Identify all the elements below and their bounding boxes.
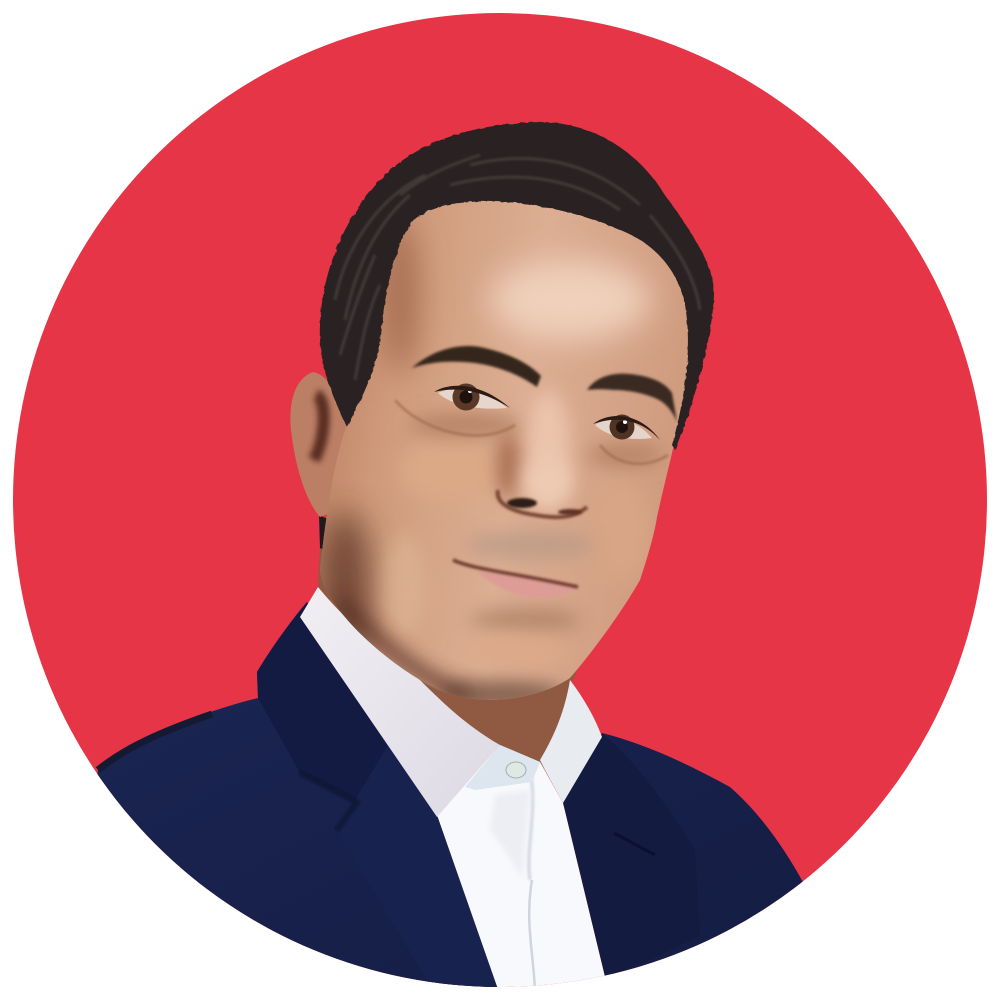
eye left (395, 384, 515, 435)
hair strands (335, 155, 700, 380)
face shading (490, 260, 650, 340)
left collar (300, 587, 500, 817)
neck (318, 546, 578, 776)
mouth (453, 560, 580, 597)
jacket (60, 602, 803, 1000)
eyebrow right (587, 374, 677, 422)
figure clipped to circle (60, 122, 803, 1000)
right lapel (563, 733, 681, 976)
ear (290, 372, 350, 517)
upper lapel (257, 602, 387, 800)
eyebrow left (412, 346, 541, 387)
shirt (300, 587, 605, 995)
hair (320, 122, 714, 450)
lower lapel (356, 758, 497, 987)
face (319, 194, 692, 709)
eye right (593, 414, 668, 464)
dark hair below ear (319, 516, 326, 550)
collar button (506, 762, 526, 778)
right collar (540, 680, 602, 803)
nose (498, 460, 587, 517)
